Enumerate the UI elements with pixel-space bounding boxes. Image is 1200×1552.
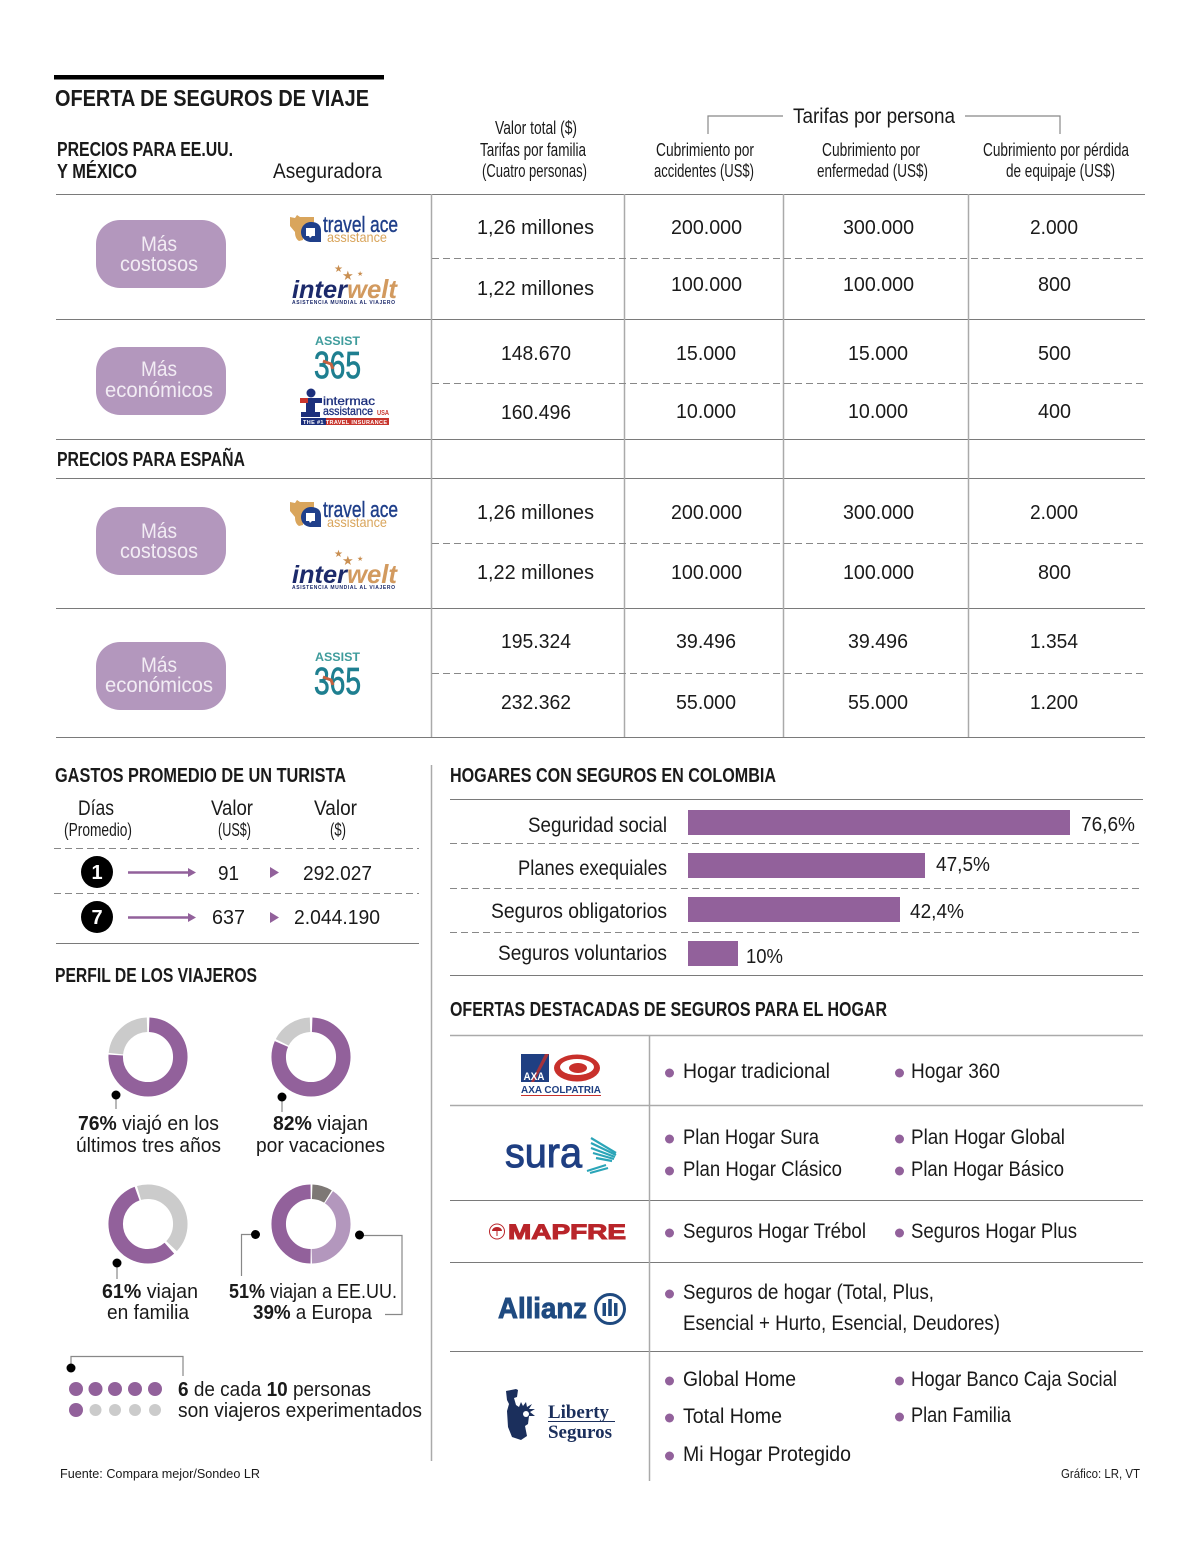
- logo: assist 365 España: 365: [314, 661, 361, 703]
- list: Allianz plans: Seguros de hogar (Total, Plus,: [683, 1281, 934, 1304]
- panel: travel insurance table: [56, 105, 1145, 738]
- list: Liberty plans: Mi Hogar Protegido: [683, 1443, 851, 1466]
- list: Liberty plans: Total Home: [683, 1405, 782, 1428]
- table values: 100.000: [843, 562, 914, 584]
- logo: intermac: [300, 388, 389, 426]
- list: Allianz plans: [665, 1281, 1000, 1335]
- panel: ofertas destacadas de seguros para el hogar: [450, 999, 1143, 1481]
- donut: destinos: 51% viajan a EE.UU.: [229, 1281, 397, 1303]
- pill: más económicos: [96, 347, 226, 415]
- table values: 1.200: [1030, 692, 1078, 714]
- table header: Aseguradora: [273, 160, 382, 183]
- table header: accidentes (US$): [654, 161, 754, 181]
- pill: más económicos España: [96, 642, 226, 710]
- table values: 55.000: [676, 692, 736, 714]
- table values: 300.000: [843, 502, 914, 524]
- logo: assist 365: 365: [314, 345, 361, 387]
- table header: de equipaje (US$): [1006, 161, 1115, 181]
- pill: más económicos España: económicos: [105, 674, 213, 697]
- bar: planes exequiales: 47,5%: [936, 854, 990, 876]
- table values: 100.000: [671, 274, 742, 296]
- pill: más costosos: costosos: [120, 253, 198, 276]
- heading: precios para España: PRECIOS PARA ESPAÑA: [57, 448, 245, 471]
- table values: 15.000: [676, 343, 736, 365]
- logo: AXA Colpatria: AXA: [524, 1071, 545, 1083]
- logo: assist 365 España: [314, 650, 361, 703]
- logo: assist 365: ASSIST: [315, 334, 361, 348]
- list: Allianz plans: Esencial + Hurto, Esencial, Deudores): [683, 1312, 1000, 1335]
- list: AXA plans: [665, 1060, 1000, 1083]
- logo: Mapfre: [490, 1221, 626, 1244]
- table values: 55.000: [848, 692, 908, 714]
- table header: Cubrimiento por pérdida: [983, 140, 1130, 160]
- table values: 195.324: [501, 631, 571, 653]
- logo: interwelt: welt: [347, 274, 398, 304]
- logo: interwelt: inter: [292, 276, 348, 304]
- row: 7 días: 2.044.190: [294, 907, 380, 929]
- bar: seguridad social: 76,6%: [1081, 814, 1135, 836]
- table values: 15.000: [848, 343, 908, 365]
- table values: 39.496: [848, 631, 908, 653]
- panel: gastos promedio de un turista: (US$): [218, 820, 251, 840]
- bar: seguridad social: [528, 810, 1135, 837]
- list: Mapfre plans: [665, 1220, 1077, 1243]
- logo: Mapfre: MAPFRE: [508, 1221, 626, 1244]
- donut: 82%: [256, 1025, 385, 1157]
- logo: interwelt: ★: [342, 268, 354, 283]
- panel: gastos promedio de un turista: ($): [330, 820, 346, 840]
- list: Liberty plans: Plan Familia: [911, 1404, 1011, 1427]
- table values: 400: [1038, 401, 1071, 423]
- list: Sura plans: [665, 1126, 1065, 1181]
- bar: seguros obligatorios: Seguros obligatorios: [491, 900, 667, 923]
- list: Liberty plans: [665, 1368, 1117, 1466]
- panel: perfil de los viajeros: [55, 965, 422, 1422]
- logo: intermac: THE #1 TRAVEL INSURANCE: [303, 420, 387, 426]
- logo: travel ace España: [290, 497, 398, 530]
- table values: 39.496: [676, 631, 736, 653]
- pill: más costosos: [96, 220, 226, 288]
- logo: interwelt España: inter: [292, 561, 348, 589]
- logo: interwelt: ★: [334, 264, 343, 275]
- bar: seguros obligatorios: 42,4%: [910, 901, 964, 923]
- table values: 10.000: [848, 401, 908, 423]
- logo: Liberty Seguros: Seguros: [548, 1422, 612, 1443]
- dots: 6 de cada 10: [66, 1356, 422, 1422]
- table header: enfermedad (US$): [817, 161, 928, 181]
- table values: 1,26 millones: [477, 217, 594, 239]
- logo: assist 365: [314, 334, 361, 387]
- row: 7 días: 637: [212, 907, 245, 929]
- logo: travel ace: [290, 212, 398, 245]
- panel: gastos promedio de un turista: Valor: [314, 797, 357, 820]
- table values: 800: [1038, 562, 1071, 584]
- table values: 200.000: [671, 502, 742, 524]
- donut: 76%: [76, 1025, 221, 1157]
- source note: Fuente: Compara mejor/Sondeo LR: [60, 1466, 260, 1481]
- panel: ofertas destacadas de seguros para el hogar: OFERTAS DESTACADAS DE SEGUROS PARA EL HOGAR: [450, 999, 887, 1021]
- logo: travel ace: travel ace: [323, 212, 398, 237]
- table values: 100.000: [671, 562, 742, 584]
- donut: destinos: [229, 1192, 402, 1324]
- logo: interwelt España: ★: [342, 553, 354, 568]
- title: [54, 75, 384, 111]
- title: OFERTA DE SEGUROS DE VIAJE: [55, 85, 369, 111]
- pill: más costosos: Más: [141, 233, 177, 256]
- table values: [477, 217, 1078, 714]
- table header: Tarifas por familia: [480, 140, 587, 160]
- table values: 300.000: [843, 217, 914, 239]
- pill: más económicos España: Más: [141, 654, 177, 677]
- donut: 82%: por vacaciones: [256, 1135, 385, 1157]
- logo: travel ace España: assistance: [327, 514, 387, 530]
- logo: interwelt: ★: [357, 270, 363, 278]
- row: 1 día: 292.027: [303, 863, 372, 885]
- list: AXA plans: Hogar tradicional: [683, 1060, 830, 1083]
- table header: Y MÉXICO: [57, 160, 137, 183]
- list: Liberty plans: Hogar Banco Caja Social: [911, 1368, 1117, 1391]
- logo: interwelt: ASISTENCIA MUNDIAL AL VIAJERO: [292, 300, 395, 306]
- table values: 2.000: [1030, 502, 1078, 524]
- logo: interwelt: [292, 264, 398, 306]
- logo: Allianz: Allianz: [498, 1293, 587, 1325]
- table values: 148.670: [501, 343, 571, 365]
- bar: seguridad social: Seguridad social: [528, 814, 667, 837]
- panel: hogares con seguros en Colombia: [450, 765, 1143, 976]
- logo: travel ace España: travel ace: [323, 497, 398, 522]
- dots: 6 de cada 10: 6 de cada 10 personas: [178, 1379, 371, 1401]
- table header: [57, 105, 1130, 183]
- bar: seguros voluntarios: Seguros voluntarios: [498, 942, 667, 965]
- table values: 232.362: [501, 692, 571, 714]
- donut: 76%: 76% viajó en los: [78, 1113, 219, 1135]
- list: AXA plans: Hogar 360: [911, 1060, 1000, 1083]
- donut: 61%: en familia: [107, 1302, 190, 1324]
- logo: Liberty Seguros: [506, 1389, 615, 1443]
- logo: interwelt España: welt: [347, 559, 398, 589]
- panel: gastos promedio de un turista: Días: [78, 797, 114, 820]
- logo: travel ace: assistance: [327, 229, 387, 245]
- list: Sura plans: Plan Hogar Básico: [911, 1158, 1064, 1181]
- panel: perfil de los viajeros: PERFIL DE LOS VIAJEROS: [55, 965, 257, 987]
- table values: 1,22 millones: [477, 562, 594, 584]
- logo: intermac: assistance: [323, 404, 373, 418]
- table header: (Cuatro personas): [482, 161, 587, 181]
- panel: gastos promedio de un turista: GASTOS PROMEDIO DE UN TURISTA: [55, 765, 346, 787]
- donut: 82%: 82% viajan: [273, 1113, 368, 1135]
- bar: seguros obligatorios: [491, 897, 964, 923]
- table values: 10.000: [676, 401, 736, 423]
- list: Liberty plans: Global Home: [683, 1368, 796, 1391]
- logo: interwelt España: ★: [357, 555, 363, 563]
- table values: 200.000: [671, 217, 742, 239]
- logo: interwelt España: ASISTENCIA MUNDIAL AL VIAJERO: [292, 585, 395, 591]
- bar: seguros voluntarios: [498, 941, 783, 968]
- panel: hogares con seguros en Colombia: HOGARES CON SEGUROS EN COLOMBIA: [450, 765, 776, 787]
- row: 7 días: 7: [91, 907, 103, 929]
- donut: destinos: 39% a Europa: [253, 1302, 373, 1324]
- list: Mapfre plans: Seguros Hogar Plus: [911, 1220, 1077, 1243]
- logo: Sura: sura: [505, 1129, 583, 1176]
- table values: 100.000: [843, 274, 914, 296]
- pill: más económicos: Más: [141, 358, 177, 381]
- row: 1 día: 1: [91, 862, 103, 884]
- bar: planes exequiales: Planes exequiales: [518, 857, 667, 880]
- list: Mapfre plans: Seguros Hogar Trébol: [683, 1220, 866, 1243]
- row: 1 día: 91: [218, 863, 239, 885]
- list: Sura plans: Plan Hogar Global: [911, 1126, 1065, 1149]
- pill: más costosos España: [96, 507, 226, 575]
- row: 1 día: [81, 856, 372, 888]
- panel: gastos promedio de un turista: [54, 765, 419, 944]
- table header: Cubrimiento por: [656, 140, 754, 160]
- donut: 76%: últimos tres años: [76, 1135, 221, 1157]
- table header: Valor total ($): [495, 118, 577, 138]
- list: Sura plans: Plan Hogar Clásico: [683, 1158, 842, 1181]
- table values: 2.000: [1030, 217, 1078, 239]
- donut: 61%: [102, 1192, 198, 1324]
- logo: Liberty Seguros: Liberty: [548, 1402, 609, 1423]
- table values: 1.354: [1030, 631, 1078, 653]
- panel: gastos promedio de un turista: Valor: [211, 797, 253, 820]
- credit note: Gráfico: LR, VT: [1061, 1466, 1140, 1481]
- table values: 160.496: [501, 402, 571, 424]
- logo: assist 365 España: ASSIST: [315, 650, 361, 664]
- bar: seguros voluntarios: 10%: [746, 946, 783, 968]
- table values: 1,26 millones: [477, 502, 594, 524]
- table header: Cubrimiento por: [822, 140, 920, 160]
- pill: más costosos España: costosos: [120, 540, 198, 563]
- table values: 1,22 millones: [477, 278, 594, 300]
- table values: 500: [1038, 343, 1071, 365]
- table header: PRECIOS PARA EE.UU.: [57, 139, 233, 161]
- row: 7 días: [81, 901, 380, 933]
- donut: 61%: 61% viajan: [102, 1281, 198, 1303]
- logo: interwelt España: [292, 549, 398, 591]
- table header: Tarifas por persona: [793, 105, 955, 128]
- logo: intermac: USA: [377, 410, 389, 417]
- list: Sura plans: Plan Hogar Sura: [683, 1126, 819, 1149]
- dots: 6 de cada 10: son viajeros experimentados: [178, 1400, 422, 1422]
- pill: más costosos España: Más: [141, 520, 177, 543]
- logo: intermac: intermac: [323, 394, 375, 408]
- logo: interwelt España: ★: [334, 549, 343, 560]
- logo: AXA Colpatria: AXA COLPATRIA: [521, 1085, 601, 1096]
- panel: gastos promedio de un turista: (Promedio): [64, 820, 132, 840]
- table values: 800: [1038, 274, 1071, 296]
- logo: AXA Colpatria: [521, 1054, 601, 1096]
- bar: planes exequiales: [518, 853, 990, 880]
- pill: más económicos: económicos: [105, 379, 213, 402]
